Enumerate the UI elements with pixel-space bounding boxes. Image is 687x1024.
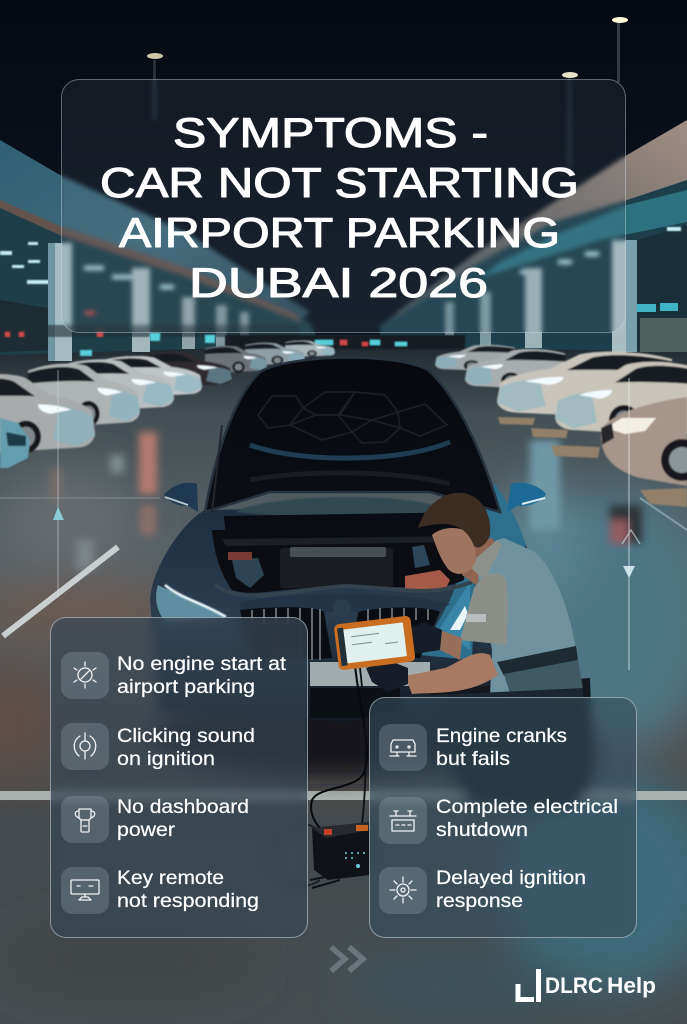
neck — [462, 538, 500, 585]
symptom: electrical shutdown — [436, 796, 618, 841]
reflections on wet floor — [50, 432, 642, 570]
symptom: no engine start — [117, 653, 287, 698]
symptom: key remote: Key remote — [117, 867, 224, 889]
symptom: no engine start: airport parking — [117, 676, 255, 698]
icon: engine cranks car — [379, 724, 427, 771]
distant lights — [0, 311, 465, 356]
icon: dashboard power — [61, 796, 109, 843]
head — [432, 528, 476, 574]
symptom: key remote: not responding — [117, 890, 259, 912]
mirrors — [164, 483, 198, 512]
symptom: no engine start: No engine start at — [117, 653, 287, 675]
logo: DLRC Help: Help — [607, 973, 656, 998]
symptom: clicking sound: on ignition — [117, 748, 215, 770]
engine bay — [212, 530, 468, 593]
title: AIRPORT PARKING — [119, 209, 560, 256]
left headlight — [156, 585, 227, 622]
icon: delayed ignition — [379, 867, 427, 914]
symptom: delayed ignition: response — [436, 890, 523, 912]
street lamps — [147, 17, 628, 168]
panel: title — [61, 79, 626, 333]
gloves — [406, 622, 442, 654]
title: SYMPTOMS - — [173, 109, 488, 156]
symptom: delayed ignition: Delayed ignition — [436, 867, 586, 889]
right canopy — [380, 120, 687, 353]
symptom: electrical shutdown: shutdown — [436, 819, 528, 841]
icon: key remote — [61, 867, 109, 914]
symptom: delayed ignition — [436, 867, 586, 912]
title: DUBAI 2026 — [189, 259, 488, 306]
symptom: no dashboard power: No dashboard — [117, 796, 249, 818]
car body — [150, 357, 546, 722]
left canopy — [0, 140, 320, 361]
symptom: engine cranks: but fails — [436, 748, 510, 770]
curbs — [498, 417, 687, 507]
chevrons — [331, 947, 363, 971]
symptom: no dashboard power: power — [117, 819, 176, 841]
grille — [240, 599, 440, 718]
ground tint blobs — [0, 470, 687, 1015]
shirt — [478, 538, 583, 696]
panel: symptoms left — [50, 617, 308, 938]
open hood — [205, 357, 500, 512]
symptom: clicking sound — [117, 725, 255, 770]
symptom: electrical shutdown: Complete electrical — [436, 796, 618, 818]
symptom: engine cranks — [436, 725, 567, 770]
symptom: key remote — [117, 867, 259, 912]
diagnostic tablet — [334, 615, 416, 670]
mechanic — [334, 493, 593, 810]
sky — [0, 0, 687, 345]
right car row — [435, 345, 687, 486]
arms — [436, 630, 462, 660]
logo: DLRC Help — [518, 969, 656, 1002]
car shadow — [150, 693, 595, 805]
logo: DLRC Help: DLRC — [545, 973, 603, 998]
title: CAR NOT STARTING — [100, 159, 579, 206]
windshield — [236, 497, 450, 516]
ground — [0, 335, 687, 1024]
symptom: engine cranks: Engine cranks — [436, 725, 567, 747]
right fender — [420, 484, 526, 660]
title — [100, 109, 579, 306]
left car row — [0, 340, 335, 468]
parking lines — [3, 547, 118, 636]
icon: engine gauge — [61, 652, 109, 699]
panel: symptoms right — [369, 697, 637, 938]
diagnostic wires and battery pack — [270, 665, 370, 888]
symptom: clicking sound: Clicking sound — [117, 725, 255, 747]
icon: battery — [379, 797, 427, 844]
symptom: no dashboard power — [117, 796, 249, 841]
icon: clicking sound — [61, 723, 109, 770]
guide lines — [53, 370, 640, 670]
